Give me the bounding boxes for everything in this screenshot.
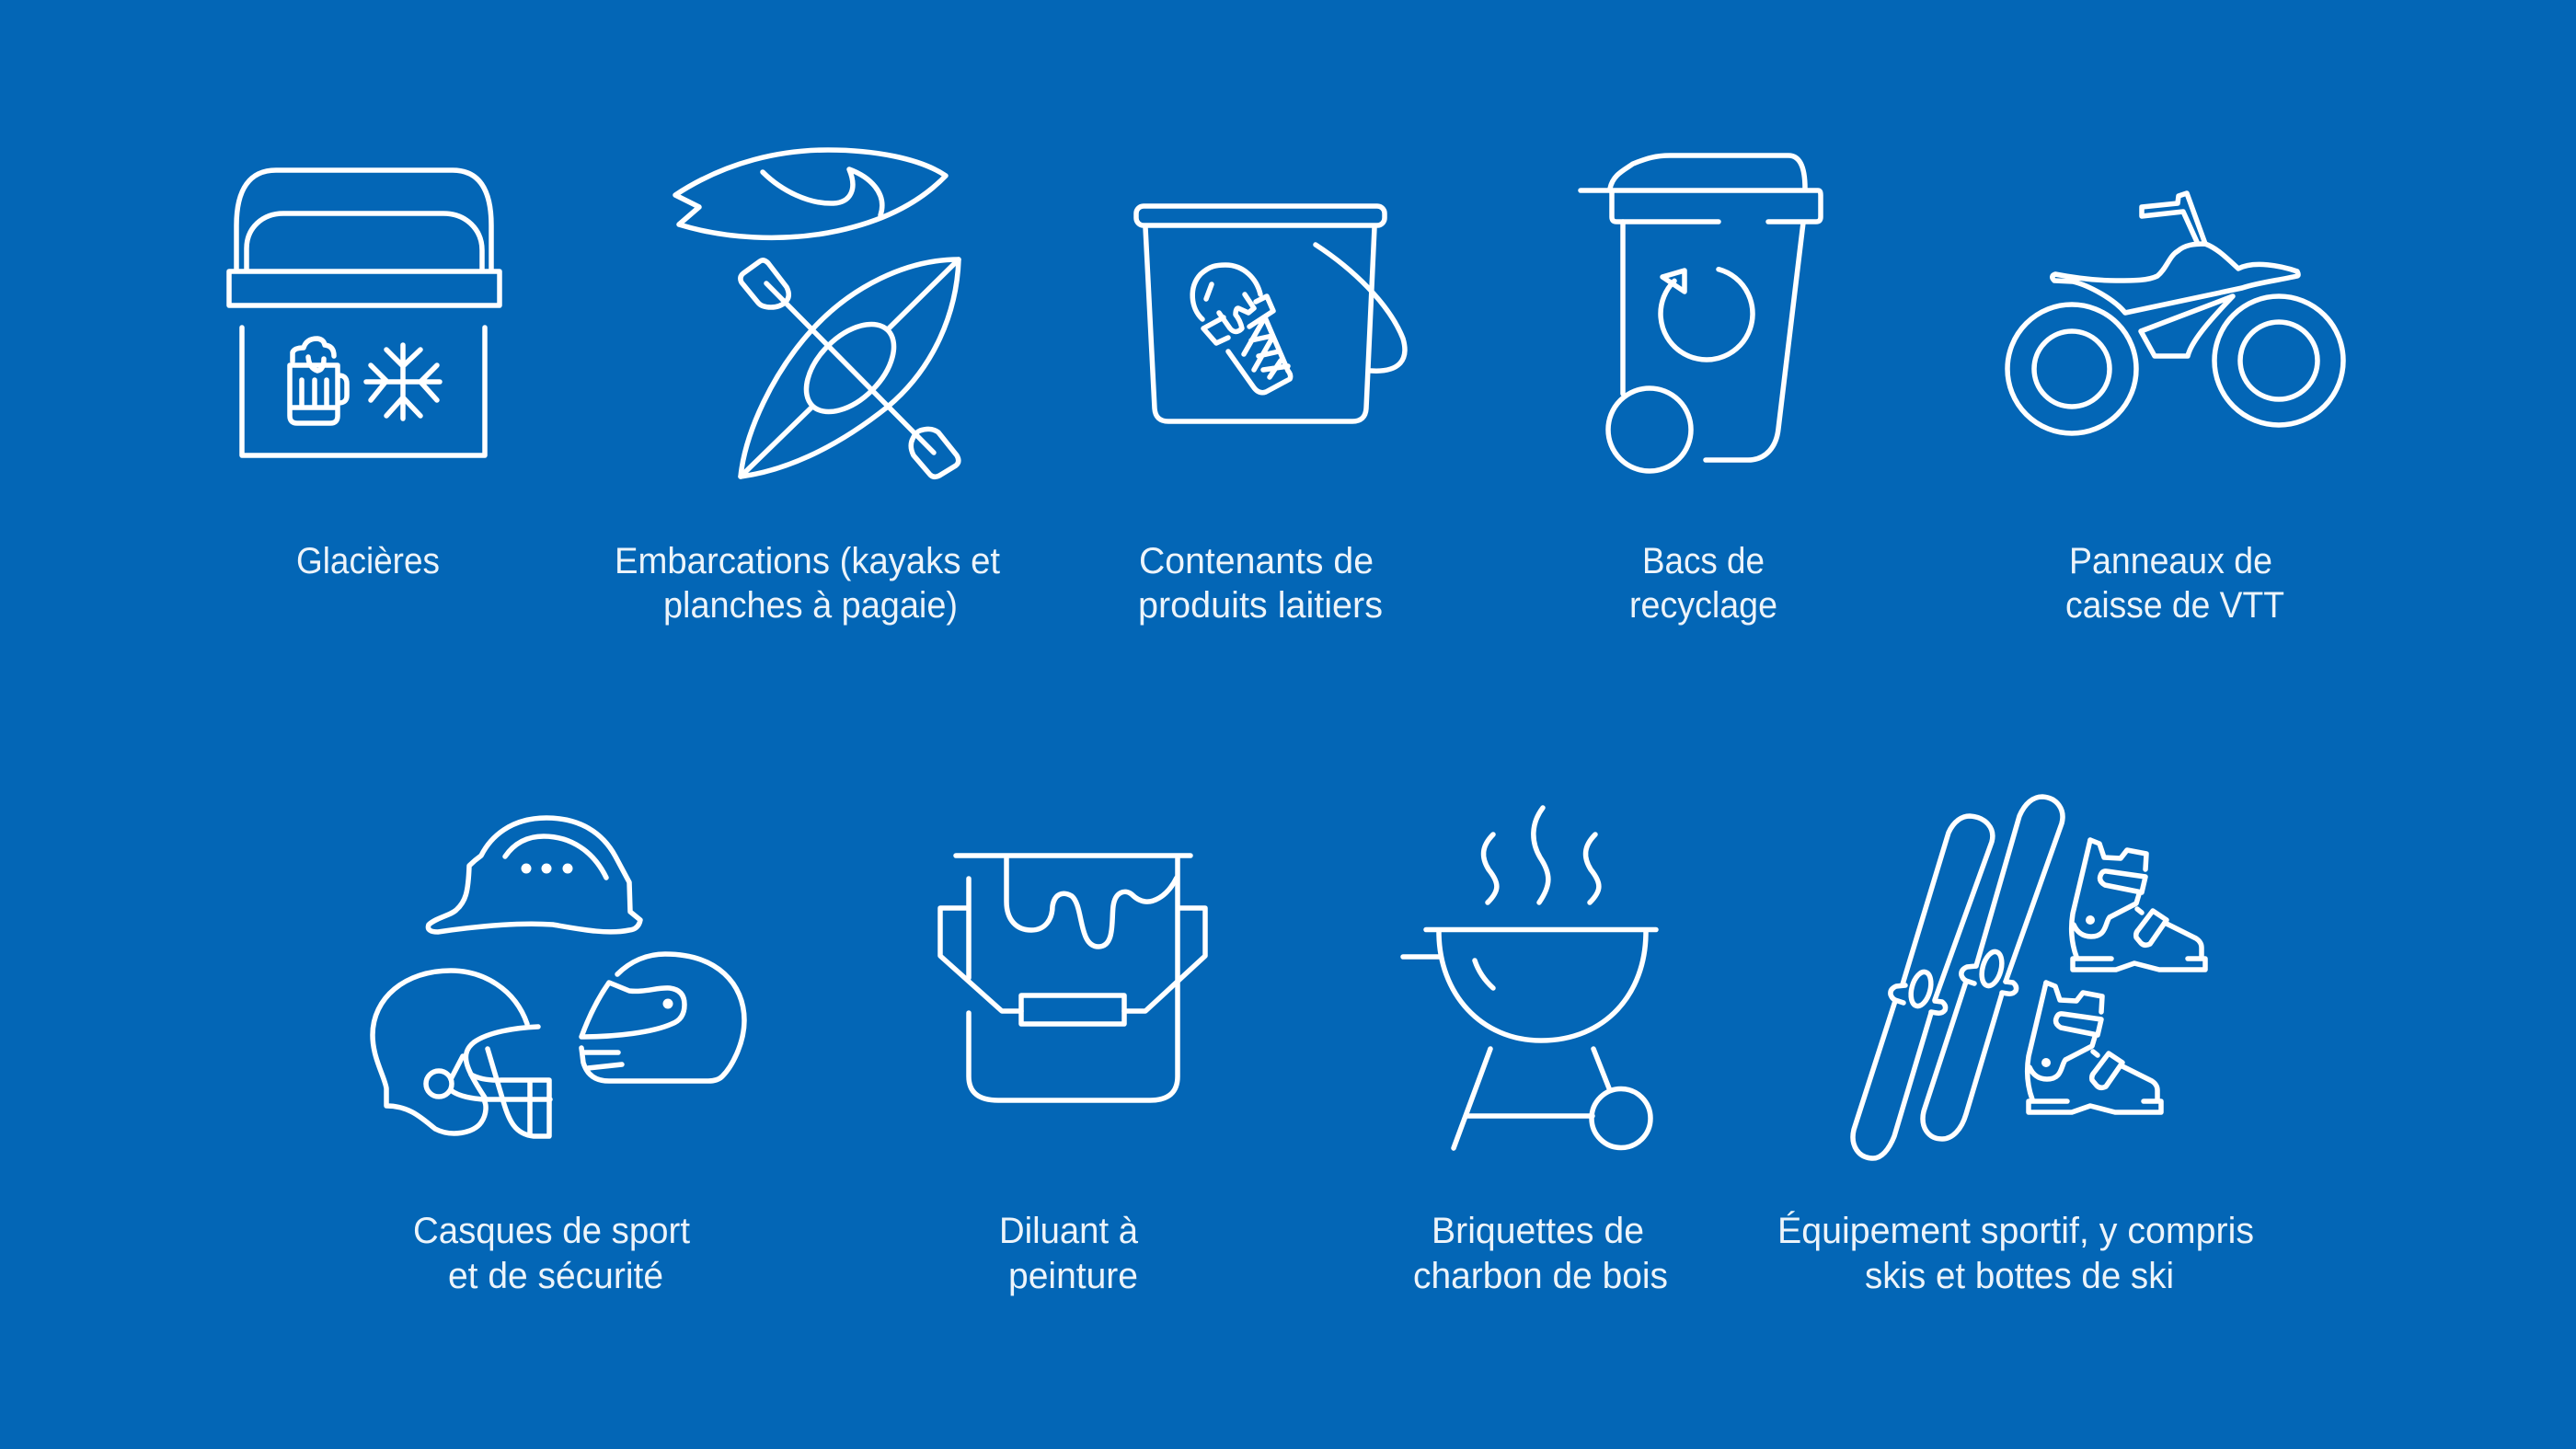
panel: coolers — [229, 170, 500, 581]
panel: sports equipment — [1777, 797, 2254, 1296]
label: sports equipment: Équipement sportif, y compris — [1777, 1210, 2254, 1251]
panel: charcoal briquettes — [1403, 808, 1668, 1296]
icon: paint can — [940, 856, 1205, 1100]
label: paint thinner: Diluant à — [999, 1211, 1139, 1251]
label: charcoal briquettes — [1413, 1211, 1668, 1296]
label: charcoal briquettes: charbon de bois — [1413, 1256, 1668, 1296]
icon: tub with ice cream — [1136, 206, 1405, 421]
label: boats — [615, 541, 1000, 626]
icon: ATV — [2007, 193, 2343, 433]
panel: ATV panels — [2007, 193, 2343, 626]
icon: ski boot lower — [2028, 983, 2161, 1112]
label: charcoal briquettes: Briquettes de — [1432, 1211, 1644, 1251]
label: dairy containers: produits laitiers — [1138, 585, 1383, 626]
label: ATV panels: Panneaux de — [2069, 541, 2272, 581]
label: boats: planches à pagaie) — [663, 585, 958, 626]
icon: kayak — [741, 259, 959, 477]
label: helmets — [413, 1211, 690, 1296]
panel: boats — [615, 150, 1000, 626]
label: dairy containers — [1138, 541, 1383, 626]
icon: barbecue — [1403, 808, 1656, 1148]
label: recycling bins — [1629, 541, 1777, 626]
label: boats: Embarcations (kayaks et — [615, 541, 1000, 581]
panel: dairy containers — [1136, 206, 1405, 626]
icon: surfboard — [675, 150, 946, 237]
label: helmets: et de sécurité — [448, 1256, 663, 1296]
label: sports equipment — [1777, 1210, 2254, 1296]
label: paint thinner: peinture — [1008, 1256, 1138, 1296]
label: ATV panels: caisse de VTT — [2065, 585, 2284, 626]
icon: hard hat — [428, 818, 640, 932]
icon: ski boot upper — [2072, 840, 2205, 970]
icon: ski one — [1853, 816, 1993, 1158]
label: recycling bins: Bacs de — [1642, 541, 1765, 581]
label: dairy containers: Contenants de — [1139, 541, 1374, 581]
label: coolers: Glacières — [296, 541, 440, 581]
panel: helmets — [373, 818, 744, 1296]
label: helmets: Casques de sport — [413, 1211, 690, 1251]
icon: cooler — [229, 170, 500, 455]
icon: motorcycle helmet — [581, 954, 744, 1081]
panel: paint thinner — [940, 856, 1205, 1296]
label: ATV panels — [2065, 541, 2284, 626]
label: recycling bins: recyclage — [1629, 585, 1777, 626]
label: sports equipment: skis et bottes de ski — [1865, 1256, 2174, 1296]
panel: recycling bins — [1581, 155, 1821, 626]
label: paint thinner — [999, 1211, 1139, 1296]
icon: recycling bin — [1581, 155, 1821, 471]
icon: football helmet — [373, 971, 550, 1136]
icon: ski two — [1923, 797, 2063, 1139]
